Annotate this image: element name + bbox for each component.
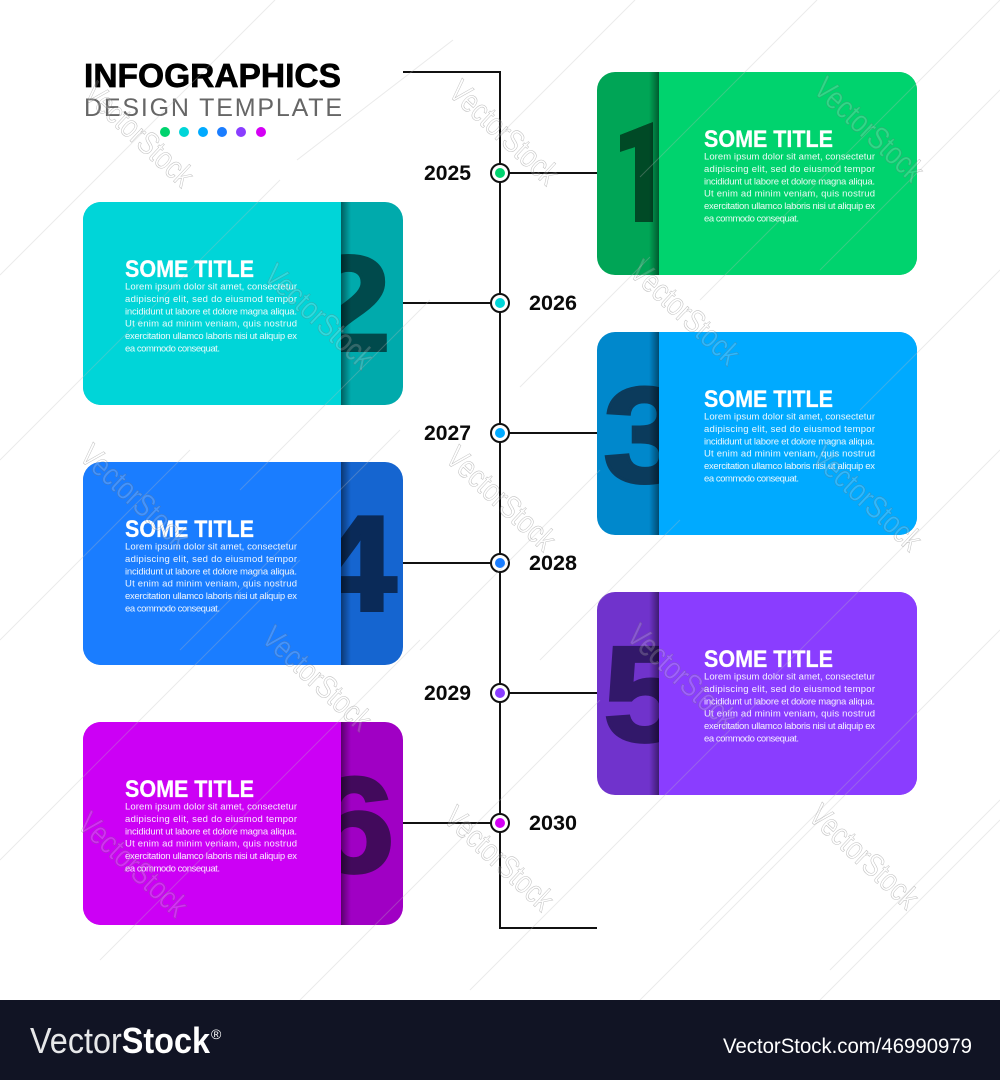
year 2028: 2028 [529, 552, 577, 575]
card 3 body [704, 412, 875, 484]
colour dots [160, 127, 266, 137]
card 6 body: Lorem ipsum dolor sit amet, consectetur [125, 802, 297, 812]
card 6 body [125, 802, 297, 874]
card 6 body: exercitation ullamco laboris nisi ut aliquip ex [125, 851, 297, 862]
watermark: repeated marks: VectorStock [620, 617, 745, 736]
card 4 body [125, 542, 297, 614]
card 2 body: ea commodo consequat. [125, 343, 220, 354]
panel: card 1 [596, 72, 917, 275]
card 3 body: Lorem ipsum dolor sit amet, consectetur [704, 412, 875, 422]
card 5 body: Lorem ipsum dolor sit amet, consectetur [704, 672, 875, 682]
node 2026 [491, 294, 509, 312]
card 6 title: SOME TITLE [125, 776, 254, 803]
card 5 body: adipiscing elit, sed do eiusmod tempor [704, 684, 875, 695]
card 1 body: ea commodo consequat. [704, 213, 799, 224]
card 1 body: exercitation ullamco laboris nisi ut aliquip ex [704, 201, 875, 212]
card 5 body: Ut enim ad minim veniam, quis nostrud [704, 709, 875, 720]
number 6: 6 [310, 749, 395, 901]
year 2030: 2030 [529, 812, 577, 835]
node 2025 [491, 164, 509, 182]
card 4 body: Ut enim ad minim veniam, quis nostrud [125, 579, 297, 590]
card 2 body: incididunt ut labore et dolore magna aliqua. [125, 306, 297, 317]
watermark: repeated marks: VectorStock [802, 797, 927, 916]
year 2026: 2026 [529, 292, 577, 315]
panel: card 5 [597, 592, 917, 795]
card 5 body: ea commodo consequat. [704, 733, 799, 744]
card 3 title: SOME TITLE [704, 386, 833, 413]
footer bar [0, 1000, 1000, 1080]
watermark: repeated marks [71, 70, 932, 924]
watermark: repeated marks: VectorStock [805, 439, 930, 558]
card 4 body: incididunt ut labore et dolore magna aliqua. [125, 566, 297, 577]
title: DESIGN TEMPLATE [84, 94, 342, 122]
card 6 body: ea commodo consequat. [125, 863, 220, 874]
node 2027 [491, 424, 509, 442]
card 6 body: incididunt ut labore et dolore magna aliqua. [125, 826, 297, 837]
card 1 body: adipiscing elit, sed do eiusmod tempor [704, 164, 875, 175]
watermark: repeated marks: VectorStock [257, 257, 382, 376]
card 3 body: exercitation ullamco laboris nisi ut aliquip ex [704, 461, 875, 472]
year 2029: 2029 [424, 682, 471, 705]
title [84, 57, 342, 122]
card 4 title: SOME TITLE [125, 516, 254, 543]
card 2 body: adipiscing elit, sed do eiusmod tempor [125, 294, 297, 305]
card 4 body: ea commodo consequat. [125, 603, 220, 614]
card 4 body: Lorem ipsum dolor sit amet, consectetur [125, 542, 297, 552]
card 2 body: exercitation ullamco laboris nisi ut aliquip ex [125, 331, 297, 342]
card 1 body: Ut enim ad minim veniam, quis nostrud [704, 189, 875, 200]
card 2 body: Ut enim ad minim veniam, quis nostrud [125, 319, 297, 330]
watermark: repeated marks: VectorStock [71, 805, 196, 924]
card 3 body: incididunt ut labore et dolore magna aliqua. [704, 436, 875, 447]
card 1 body: Lorem ipsum dolor sit amet, consectetur [704, 152, 875, 162]
number 2: 2 [306, 227, 391, 380]
number 4: 4 [312, 487, 397, 640]
number 3: 3 [603, 359, 688, 511]
card 6 body: adipiscing elit, sed do eiusmod tempor [125, 814, 297, 825]
card 1 body: incididunt ut labore et dolore magna aliqua. [704, 176, 875, 187]
watermark: repeated marks: VectorStock [439, 439, 564, 558]
footer logo: VectorStock [30, 1020, 211, 1061]
card 5 title: SOME TITLE [704, 646, 833, 673]
card 2 body [125, 282, 297, 354]
card 5 body: exercitation ullamco laboris nisi ut aliquip ex [704, 721, 875, 732]
watermark: repeated marks: VectorStock [255, 619, 380, 738]
card 5 body: incididunt ut labore et dolore magna aliqua. [704, 696, 875, 707]
card 3 body: Ut enim ad minim veniam, quis nostrud [704, 449, 875, 460]
watermark: repeated marks: VectorStock [73, 437, 198, 556]
card 4 body: adipiscing elit, sed do eiusmod tempor [125, 554, 297, 565]
timeline [403, 72, 597, 928]
card 6 body: Ut enim ad minim veniam, quis nostrud [125, 839, 297, 850]
footer url: VectorStock.com/46990979 [723, 1035, 972, 1058]
year 2027: 2027 [424, 422, 471, 445]
card 3 body: adipiscing elit, sed do eiusmod tempor [704, 424, 875, 435]
node 2030 [491, 814, 509, 832]
card 1 title: SOME TITLE [704, 126, 833, 153]
panel: card 4 [83, 462, 403, 665]
watermark: repeated marks: VectorStock [442, 73, 567, 192]
card 2 body: Lorem ipsum dolor sit amet, consectetur [125, 282, 297, 292]
watermark: repeated marks: VectorStock [437, 799, 562, 918]
node 2028 [491, 554, 509, 572]
card 4 body: exercitation ullamco laboris nisi ut aliquip ex [125, 591, 297, 602]
footer registered mark: ® [211, 1026, 222, 1042]
card 1 body [704, 152, 875, 224]
number 1: 1 [596, 90, 677, 253]
year 2025: 2025 [424, 162, 471, 185]
node 2029 [491, 684, 509, 702]
card 3 body: ea commodo consequat. [704, 473, 799, 484]
watermark: repeated marks: VectorStock [807, 70, 932, 189]
panel: card 6 [83, 722, 403, 925]
panel: card 3 [597, 332, 917, 535]
watermark: repeated marks: VectorStock [623, 253, 748, 372]
number 5: 5 [603, 618, 688, 770]
title: INFOGRAPHICS [84, 57, 341, 94]
watermark: repeated marks: VectorStock [77, 75, 202, 194]
card 5 body [704, 672, 875, 744]
panel: card 2 [83, 202, 403, 405]
card 2 title: SOME TITLE [125, 256, 254, 283]
